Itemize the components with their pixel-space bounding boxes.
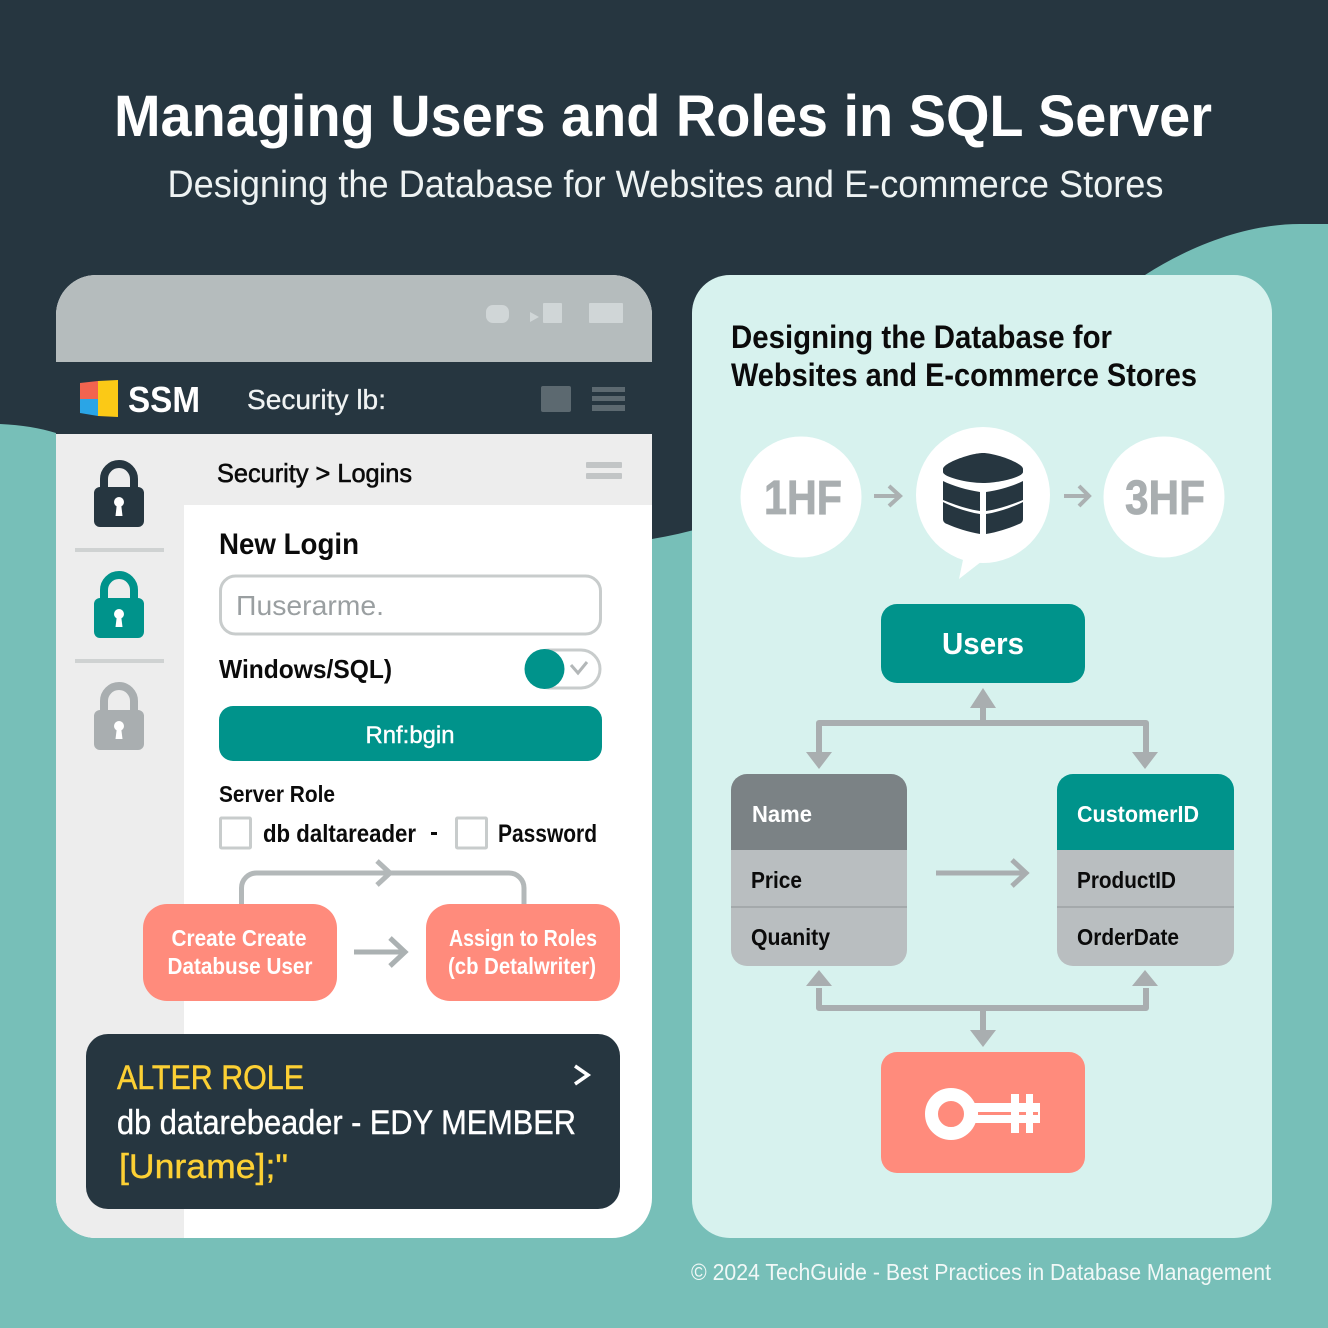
step: assign to roles: Assign to Roles: [449, 925, 597, 951]
step: create database user: Create Create: [172, 925, 306, 951]
username input: Πuserarme.: [236, 590, 384, 621]
table: orders: CustomerID: [1077, 801, 1199, 827]
circle: 1HF: 1HF: [764, 472, 842, 525]
window controls: [486, 303, 623, 323]
table: products: Name: [752, 801, 812, 827]
toolbar icons: [541, 386, 625, 412]
arrow: 1HF to database: [874, 486, 900, 506]
checkbox row: [220, 818, 597, 848]
toolbar label: Security: Security lb:: [247, 384, 386, 415]
icon: windows logo: [80, 380, 118, 417]
subtitle: Designing the Database for Websites and E-commerce Stores: [168, 164, 1164, 206]
arrow: loop connector: [242, 861, 524, 905]
sidebar icon: gray lock: [94, 686, 144, 750]
code block: ALTER ROLE: [117, 1059, 304, 1097]
step: create database user: Databuse User: [168, 953, 313, 979]
icon: database bubble: [916, 427, 1050, 579]
step: assign to roles: [426, 904, 620, 1001]
username input: [220, 576, 600, 634]
sidebar icon: dark lock: [94, 464, 144, 527]
step: create database user: [143, 904, 337, 1001]
label: Windows/SQL: Windows/SQL): [219, 654, 392, 684]
toolbar label: SSM: SSM: [128, 379, 200, 420]
panel: SSMS window: [56, 275, 652, 1238]
table: orders: ProductID: [1077, 867, 1176, 893]
footer: © 2024 TechGuide - Best Practices in Database Management: [691, 1259, 1272, 1285]
connector: tables to key: [806, 970, 1158, 1047]
table: products: [731, 774, 907, 966]
circle: 1HF: [740, 436, 862, 558]
circle: 3HF: [1104, 436, 1224, 558]
box: key: [881, 1052, 1085, 1173]
panel heading: Websites and E-commerce Stores: [731, 357, 1197, 393]
arrow: create to assign: [354, 938, 405, 966]
button: add login: Rnf:bgin: [366, 722, 454, 749]
icon: key: [932, 1094, 1040, 1134]
step: assign to roles: (cb Detalwriter): [448, 953, 596, 979]
checkbox row: db daltareader: [263, 820, 416, 848]
code block: db datarebeader - EDY MEMBER: [117, 1104, 576, 1142]
title: Managing Users and Roles in SQL Server: [114, 84, 1212, 149]
code block: [Unrame];": [119, 1148, 288, 1186]
table: products: Price: [751, 867, 802, 893]
box: Users: Users: [942, 626, 1024, 661]
sidebar icon: teal lock: [94, 575, 144, 638]
arrow: table relation: [936, 860, 1026, 886]
breadcrumb: Security > Logins: [217, 458, 412, 488]
table: orders: [1057, 774, 1234, 966]
table: products: Quanity: [751, 924, 830, 950]
panel heading: Designing the Database for: [731, 319, 1112, 355]
checkbox row: Password: [498, 820, 597, 848]
panel heading: [731, 319, 1197, 393]
panel: database design: [692, 275, 1272, 1238]
connector: users to tables: [806, 688, 1158, 769]
table: orders: OrderDate: [1077, 924, 1179, 950]
button: add login: [219, 706, 602, 761]
circle: 3HF: 3HF: [1125, 472, 1205, 525]
box: Users: [881, 604, 1085, 683]
toggle: [524, 649, 600, 689]
code block: [86, 1034, 620, 1209]
breadcrumb menu icon: [586, 462, 622, 479]
label: Server Role: Server Role: [219, 781, 335, 807]
heading: New Login: New Login: [219, 528, 359, 561]
arrow: database to 3HF: [1064, 486, 1089, 506]
